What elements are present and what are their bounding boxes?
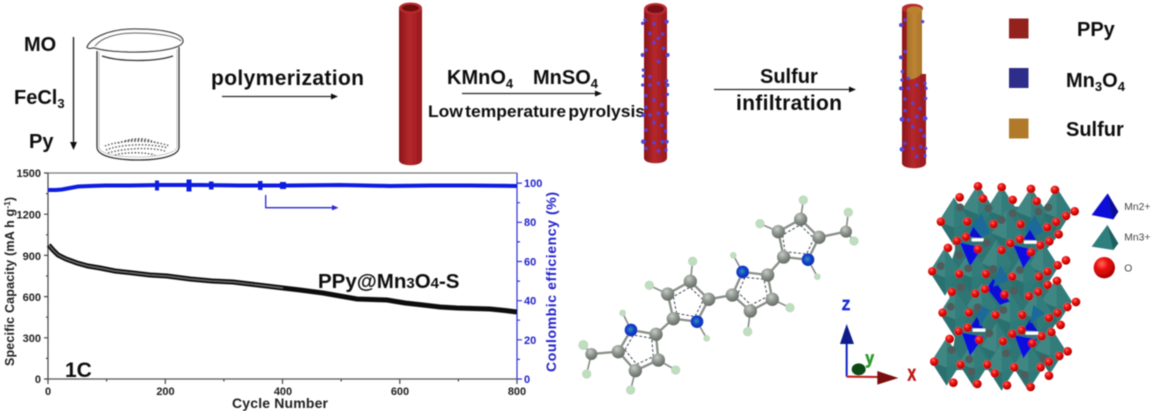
icon: xyz axes: y (865, 348, 874, 368)
y axis right ticks: 40 (524, 296, 536, 308)
x axis title: Cycle Number (232, 395, 329, 411)
reagent labels: Py (29, 131, 54, 153)
label: sulfur infiltration step: Sulfur (760, 66, 818, 88)
nitrogen atoms (625, 253, 814, 336)
y axis left ticks: 0 (35, 374, 41, 386)
label: sulfur infiltration step: infiltration (736, 92, 842, 115)
bonds (583, 200, 854, 390)
y axis right ticks: 100 (524, 178, 542, 190)
y axis title left: -1 (3, 201, 12, 209)
arrow: reagent addition order (70, 37, 77, 150)
y axis right ticks: 60 (524, 256, 536, 268)
legend: materials: 3 (1095, 79, 1102, 94)
Mn3+ octahedra (930, 184, 1072, 391)
x axis ticks: 800 (508, 386, 526, 398)
legend: crystal species: O (1124, 263, 1132, 274)
series: coulombic efficiency (48, 180, 517, 192)
y axis left ticks: 1500 (17, 168, 41, 180)
icon: xyz axes: Z (842, 298, 850, 314)
reagent labels (14, 34, 65, 153)
x axis ticks: 0 (45, 386, 51, 398)
tube: PPy with Mn3O4 particles (641, 3, 669, 163)
y axis right ticks: 20 (524, 335, 536, 347)
icon: xyz axes: X (908, 366, 916, 385)
tube: PPy with Mn3O4 and sulfur (899, 4, 927, 168)
legend: materials: 4 (1118, 79, 1126, 94)
label: KMnO4 MnSO4 pyrolysis step: 4 (506, 76, 514, 91)
label: KMnO4 MnSO4 pyrolysis step: 4 (591, 76, 599, 91)
aromatic dashed bonds (625, 225, 814, 364)
legend: materials: PPy (1077, 19, 1116, 41)
rate label: 1C (65, 359, 92, 382)
molecule: polypyrrole chain (578, 195, 859, 395)
y axis left ticks: 900 (23, 251, 41, 263)
beaker sediment (105, 139, 170, 155)
reagent labels: MO (24, 34, 56, 56)
series: specific capacity (49, 245, 517, 312)
back oxygen atoms (937, 203, 1052, 379)
chart: cycling performance (3, 168, 559, 411)
tube: PPy (399, 2, 422, 165)
legend: materials: O (1102, 70, 1118, 92)
legend: crystal species: Mn2+ (1124, 202, 1150, 213)
x axis ticks (45, 386, 526, 398)
crystal silhouette (945, 207, 1060, 370)
reagent labels: 3 (57, 96, 65, 111)
y axis left ticks: 1200 (17, 210, 41, 222)
carbon atoms (585, 213, 852, 377)
icon: beaker (87, 29, 183, 160)
Mn2+ tetrahedra (960, 213, 1045, 358)
Mn3O4 particles (899, 18, 927, 158)
y axis left ticks: 600 (23, 292, 41, 304)
x axis ticks: 400 (274, 386, 292, 398)
plot frame (44, 173, 522, 384)
y axis right ticks (524, 178, 542, 386)
crystal structure: Mn3O4 (928, 182, 1080, 391)
x axis ticks: 600 (391, 386, 409, 398)
x axis ticks: 200 (156, 386, 175, 398)
legend: materials: Sulfur (1066, 119, 1124, 141)
label: polymerization step: polymerization (211, 67, 364, 90)
white gaps (972, 238, 1038, 335)
reagent labels: FeCl (14, 87, 57, 109)
label: KMnO4 MnSO4 pyrolysis step: KMnO (447, 67, 506, 89)
hydrogen atoms (578, 195, 859, 395)
label: KMnO4 MnSO4 pyrolysis step: MnSO (533, 67, 591, 89)
Mn3O4 particles (641, 18, 669, 152)
legend: materials: Mn (1066, 70, 1095, 92)
icon: xyz axes (840, 298, 916, 385)
y axis left ticks (17, 168, 41, 386)
legend: materials (1009, 18, 1126, 141)
y axis left ticks: 300 (23, 333, 41, 345)
y axis title left: Specific Capacity (mA h g (3, 209, 17, 366)
y axis title left: ) (3, 197, 17, 201)
label: sulfur infiltration step (714, 66, 856, 115)
y axis right ticks: 80 (524, 217, 536, 229)
legend: crystal species (1092, 193, 1150, 278)
label: KMnO4 MnSO4 pyrolysis step: Low temperature pyrolysis (428, 102, 645, 121)
series label: PPy@Mn3O4-S (318, 270, 459, 293)
label: KMnO4 MnSO4 pyrolysis step (428, 67, 645, 121)
oxygen atoms (928, 182, 1080, 391)
arrow: points to right axis (266, 195, 338, 210)
y axis title right: Coulombic efficiency (%) (543, 192, 559, 372)
legend: crystal species: Mn3+ (1124, 233, 1150, 244)
y axis right ticks: 0 (524, 374, 530, 386)
